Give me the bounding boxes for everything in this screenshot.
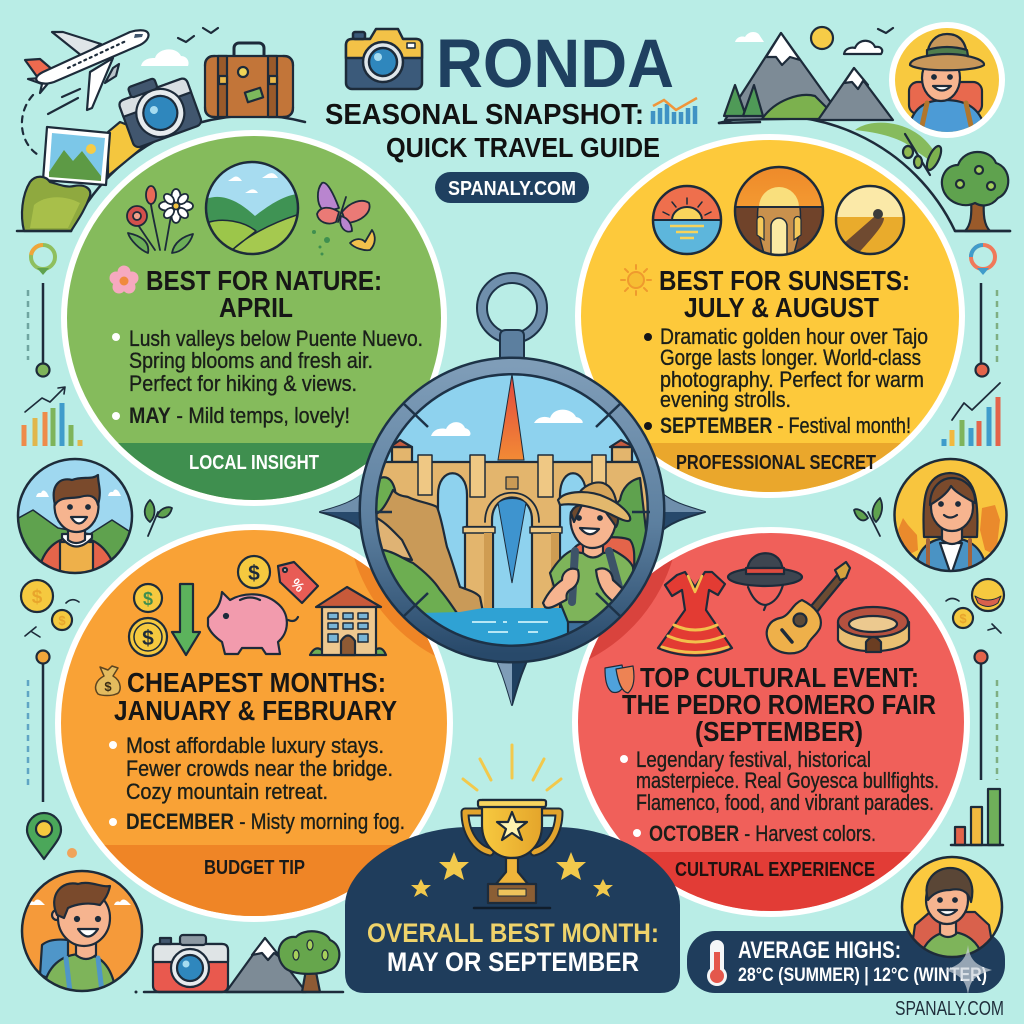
panel background [570, 134, 970, 503]
icon: stars [411, 852, 613, 897]
icon: money bag: $ [104, 679, 112, 694]
backpack [573, 536, 636, 566]
icon: thermometer [707, 940, 727, 986]
icon: leaf right [854, 498, 882, 536]
left cliff [378, 476, 484, 613]
trousers [566, 622, 585, 633]
icon: leaf left [145, 500, 172, 536]
bullet text: Lush valleys below Puente Nuevo. [129, 326, 423, 351]
bullet text: Cozy mountain retreat. [126, 779, 328, 804]
heading [659, 265, 910, 323]
river [425, 608, 567, 644]
base line [719, 122, 760, 123]
dashed line [27, 290, 29, 360]
icon: butterflies [317, 183, 375, 250]
node [36, 364, 50, 376]
timeline [42, 283, 44, 365]
label: budget tip: BUDGET TIP [204, 857, 305, 879]
dot [67, 848, 77, 858]
compass dial ring [368, 366, 656, 654]
icon: money bag [96, 666, 120, 696]
bullet text [644, 324, 928, 438]
bullet text: Gorge lasts longer. World-class [660, 345, 921, 370]
right pier [532, 527, 560, 612]
bullet text [109, 733, 405, 834]
left timeline upper [28, 245, 55, 376]
icon: red camera [153, 935, 228, 992]
icon: down arrow [172, 584, 200, 655]
icon: bush [22, 177, 90, 231]
heading [146, 265, 382, 323]
heading: BEST FOR SUNSETS: [659, 265, 910, 296]
bullet text: SEPTEMBER - Festival month! [660, 413, 911, 438]
heading [114, 667, 397, 726]
bullet text: Perfect for hiking & views. [129, 371, 357, 396]
left timeline lower [21, 580, 79, 859]
bar chart lower right [951, 789, 1003, 845]
icon: valley landscape [204, 162, 300, 260]
icon: coins: $ [58, 613, 66, 628]
illustration: camera, mountain and tree [134, 931, 343, 994]
bridge scene [378, 376, 646, 644]
panel background [60, 130, 460, 513]
speed lines [48, 89, 80, 114]
illustration: mountains top right [719, 27, 1010, 231]
callout: average highs [687, 931, 1005, 993]
sparkle mark [945, 945, 992, 995]
icon: trophy [465, 800, 559, 908]
dashed line [27, 680, 29, 790]
deck [370, 462, 660, 528]
hat crown [577, 483, 617, 508]
heading: JULY & AUGUST [684, 292, 879, 323]
website pill: SPANALY.COM [448, 178, 576, 200]
timeline [980, 283, 982, 365]
panel: cheapest months [55, 524, 453, 922]
torso [550, 550, 635, 622]
navy shape [345, 827, 680, 993]
bullet text: Dramatic golden hour over Tajo [660, 324, 928, 349]
icon: suitcase [205, 43, 293, 117]
compass with Puente Nuevo [320, 278, 705, 705]
dashed line [996, 680, 998, 780]
panel background [572, 527, 970, 917]
icon: hotel [310, 587, 386, 655]
icon: pink flower [110, 266, 138, 294]
heading: (SEPTEMBER) [695, 716, 863, 747]
icon: coins: $ [142, 627, 154, 650]
icon: coins [946, 579, 1004, 633]
icon: olive tree [942, 152, 1008, 231]
icon: flamenco dress [658, 572, 732, 656]
eyes [577, 516, 581, 520]
compass needle south [498, 498, 526, 583]
icon: piggy bank [208, 592, 298, 654]
icon: coins: $ [32, 587, 43, 608]
chart right [944, 383, 1000, 446]
carved niche [506, 477, 518, 489]
icon: coins [21, 580, 79, 637]
timeline [980, 664, 982, 780]
decorative arc: top right [719, 116, 1010, 231]
heading: APRIL [219, 292, 293, 323]
icon: coins [129, 584, 167, 656]
panel: sunsets [570, 134, 970, 503]
castle towers [390, 440, 634, 462]
node [974, 650, 988, 664]
icon: pines [724, 85, 763, 116]
icon: tree [279, 931, 339, 992]
subtitle line 2: QUICK TRAVEL GUIDE [386, 132, 660, 163]
bullet text [112, 326, 423, 428]
avatar: hiker bottom left [22, 871, 142, 992]
right arm [596, 568, 624, 604]
base line [17, 230, 71, 232]
icon: pin [971, 245, 995, 275]
bullet text: evening strolls. [660, 387, 791, 412]
icon: rays [463, 745, 561, 790]
bridge [382, 454, 646, 608]
icon: coin: $ [248, 562, 260, 585]
icon: discount tag [278, 562, 318, 603]
chart left [24, 387, 80, 446]
icon: mountain [226, 938, 306, 992]
left pier [465, 527, 493, 612]
icon: sea sunset [650, 186, 724, 260]
title: Ronda: RONDA [436, 25, 674, 102]
left arch [438, 473, 467, 530]
straps [572, 551, 622, 602]
traveler [543, 483, 635, 640]
icon: cordobes hat [728, 553, 802, 610]
avatar: woman right [894, 459, 1006, 575]
bullet text [620, 747, 939, 846]
icon: title camera [346, 29, 422, 89]
icon: pin [31, 245, 55, 275]
label: local insight: LOCAL INSIGHT [189, 452, 319, 474]
panel background [55, 524, 453, 922]
bullet text: photography. Perfect for warm [660, 367, 924, 392]
icon: cloud [141, 49, 189, 66]
avatar: hiker left [15, 459, 135, 580]
icon: flight path [22, 95, 40, 156]
base line [144, 991, 343, 993]
right timeline lower [946, 579, 1004, 780]
pier shade [484, 533, 559, 611]
head [570, 500, 616, 548]
subtitle line 1: SEASONAL SNAPSHOT: [325, 99, 644, 131]
right timeline upper [971, 245, 997, 376]
heading: THE PEDRO ROMERO FAIR [622, 689, 936, 720]
icon: green pin [27, 813, 61, 859]
icon: small mountain [818, 68, 893, 120]
compass needle north [498, 374, 524, 460]
centre arch trim [485, 493, 539, 522]
heading: JANUARY & FEBRUARY [114, 695, 397, 726]
icon: airplane [25, 30, 149, 110]
left arm [543, 569, 579, 608]
icon: bridge sunset [734, 166, 824, 256]
bullet text: MAY - Mild temps, lovely! [129, 403, 350, 428]
heading [622, 662, 936, 747]
compass ring handle [482, 278, 542, 360]
green dots [312, 230, 330, 256]
icon: mini chart [653, 98, 697, 124]
pill [687, 931, 1005, 993]
icon: sun [811, 27, 833, 49]
bullet text: Most affordable luxury stays. [126, 733, 384, 758]
label: AVERAGE HIGHS: [738, 937, 901, 964]
answer: MAY OR SEPTEMBER [387, 947, 639, 977]
bullet text: masterpiece. Real Goyesca bullfights. [636, 768, 939, 793]
node [976, 364, 988, 376]
centre arch [492, 498, 532, 530]
website pill [435, 172, 589, 203]
label: cultural experience: CULTURAL EXPERIENCE [675, 859, 875, 881]
dot [134, 990, 138, 994]
bullet text: Flamenco, food, and vibrant parades. [636, 790, 934, 815]
icon: photo [43, 127, 110, 185]
posts [418, 455, 606, 497]
gorge behind arches [370, 527, 660, 617]
bullet text: Legendary festival, historical [636, 747, 871, 772]
icon: yellow map behind camera [108, 122, 142, 176]
decorative arc: top left [71, 115, 305, 231]
compass points [320, 490, 705, 705]
bullet text: Spring blooms and fresh air. [129, 348, 373, 373]
panel: overall best month [345, 745, 680, 993]
icon: bullring [838, 607, 909, 652]
icon: theatre masks [605, 665, 634, 693]
avatar: hiker top right [889, 22, 1005, 138]
heading: OVERALL BEST MONTH: [367, 918, 659, 948]
dashed line [996, 290, 998, 362]
icon: discount tag: % [288, 575, 308, 595]
bullet text: DECEMBER - Misty morning fog. [126, 809, 405, 834]
base line [955, 230, 1010, 232]
icon: guitar [767, 562, 850, 653]
title block [325, 25, 697, 203]
icon: sun [621, 265, 651, 295]
pier caps [463, 527, 562, 533]
icon: green hill [855, 123, 937, 165]
hair [571, 505, 618, 527]
right hillside [612, 476, 646, 564]
icon: large mountain [725, 33, 842, 120]
neck [583, 542, 603, 558]
heading: TOP CULTURAL EVENT: [640, 662, 919, 693]
icon: birds [178, 28, 218, 42]
timeline [42, 664, 44, 802]
icon: coin [238, 556, 270, 588]
icon: olive branch [903, 134, 944, 175]
node [36, 650, 50, 664]
icon: coins: $ [959, 611, 967, 626]
icon: road at dusk [835, 185, 905, 257]
heading: BEST FOR NATURE: [146, 265, 382, 296]
illustration: travel items top left [17, 28, 293, 231]
bullet text: OCTOBER - Harvest colors. [649, 821, 876, 846]
icon: flowers [127, 186, 193, 253]
clouds [431, 410, 583, 436]
icon: coins: $ [143, 589, 153, 609]
panel: nature [60, 130, 460, 513]
icon: clouds and bird [735, 28, 893, 54]
hat brim [558, 492, 630, 521]
avatar: hiker bottom right [902, 857, 1002, 960]
sky [386, 376, 638, 461]
label: professional secret: PROFESSIONAL SECRET [676, 452, 876, 474]
icon: camera [115, 68, 203, 149]
right arch [560, 473, 586, 530]
heading: CHEAPEST MONTHS: [127, 667, 386, 698]
bullet text: Fewer crowds near the bridge. [126, 756, 393, 781]
smile [580, 528, 599, 534]
panel: culture [572, 527, 970, 917]
